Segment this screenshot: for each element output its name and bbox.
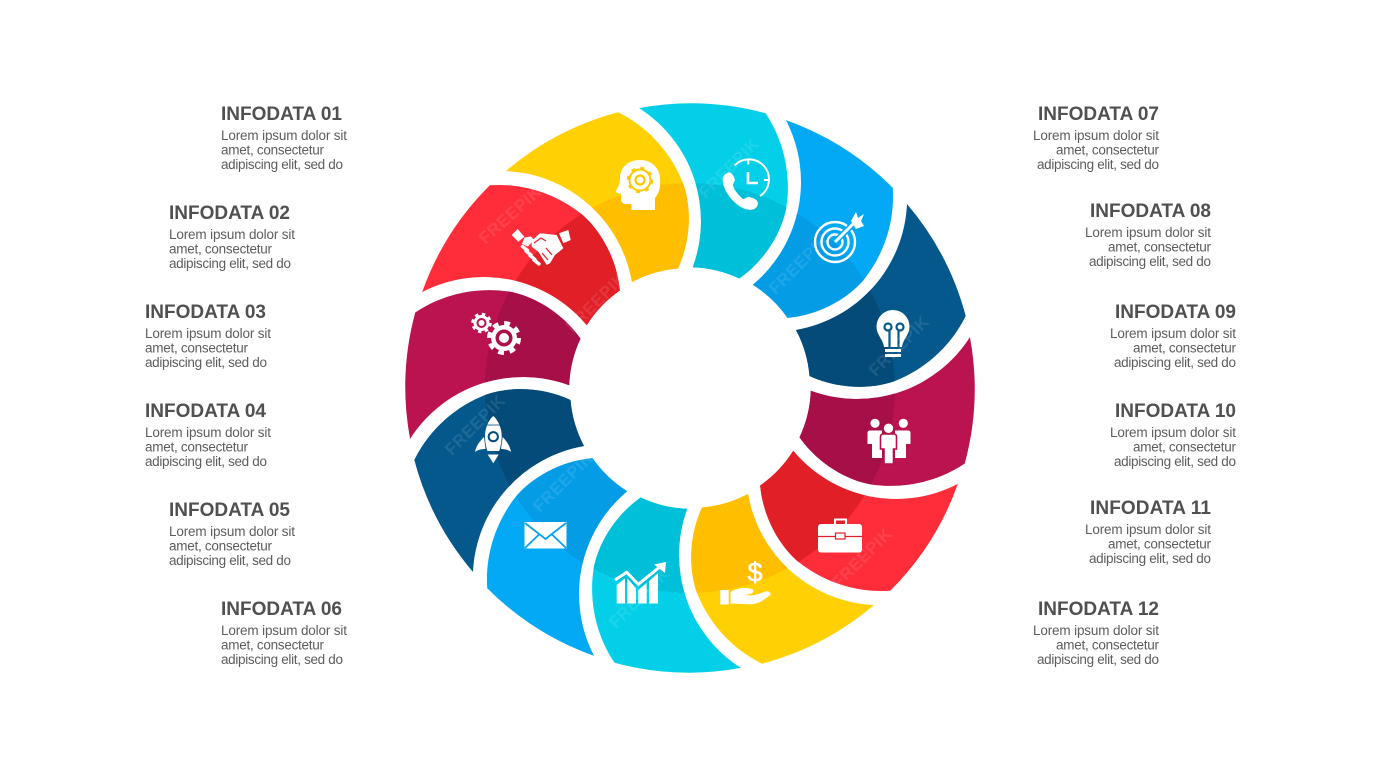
watermark text: FREEPIK <box>865 312 933 380</box>
label: INFODATA 05: Lorem ipsum dolor sit <box>169 524 295 539</box>
label: INFODATA 10: INFODATA 10 <box>1115 401 1236 422</box>
label: INFODATA 06: Lorem ipsum dolor sit <box>221 623 347 638</box>
label: INFODATA 01: Lorem ipsum dolor sit <box>221 128 347 143</box>
label: INFODATA 12: amet, consectetur <box>1056 638 1160 652</box>
label: INFODATA 01: adipiscing elit, sed do <box>221 157 343 172</box>
label: INFODATA 01: amet, consectetur <box>221 142 324 158</box>
label: INFODATA 06: INFODATA 06 <box>221 599 342 620</box>
label: INFODATA 02: INFODATA 02 <box>169 203 290 224</box>
watermark text: FREEPIK <box>765 230 833 298</box>
label: INFODATA 05 <box>169 500 295 568</box>
segment 05: blue with envelope icon <box>486 458 628 656</box>
label: INFODATA 03: adipiscing elit, sed do <box>145 355 267 370</box>
segment 01: yellow with head icon <box>506 112 689 282</box>
icon: rocket <box>475 416 511 463</box>
label: INFODATA 05: adipiscing elit, sed do <box>169 553 291 568</box>
segment 03: magenta with gears icon <box>405 290 580 439</box>
label: INFODATA 12: Lorem ipsum dolor sit <box>1033 623 1159 638</box>
label: INFODATA 12: adipiscing elit, sed do <box>1037 652 1159 667</box>
label: INFODATA 02: Lorem ipsum dolor sit <box>169 227 295 242</box>
label: INFODATA 02: amet, consectetur <box>169 242 272 256</box>
watermark text: FREEPIK <box>605 564 673 632</box>
label: INFODATA 02: adipiscing elit, sed do <box>169 256 291 271</box>
label: INFODATA 06: adipiscing elit, sed do <box>221 652 343 667</box>
label: INFODATA 09: Lorem ipsum dolor sit <box>1110 326 1236 341</box>
icon: growth chart <box>615 562 666 604</box>
label: INFODATA 03: amet, consectetur <box>145 340 248 356</box>
label: INFODATA 11: amet, consectetur <box>1108 536 1212 552</box>
infographic: ring with twelve labelled segments <box>146 103 1236 673</box>
label: INFODATA 09: adipiscing elit, sed do <box>1114 355 1236 370</box>
right column labels <box>1033 104 1236 667</box>
segment 11: red with briefcase icon <box>760 450 958 591</box>
left column labels <box>145 104 347 667</box>
label: INFODATA 08: adipiscing elit, sed do <box>1089 254 1211 269</box>
label: INFODATA 09: INFODATA 09 <box>1115 302 1236 323</box>
watermark text: FREEPIK <box>475 182 546 248</box>
label: INFODATA 04 <box>145 401 271 469</box>
label: INFODATA 04: INFODATA 04 <box>145 401 266 422</box>
label: INFODATA 08: INFODATA 08 <box>1090 201 1211 222</box>
watermark text: FREEPIK <box>441 391 509 459</box>
label: INFODATA 03: Lorem ipsum dolor sit <box>145 326 271 341</box>
icon: light bulb <box>876 310 910 357</box>
label: INFODATA 08: amet, consectetur <box>1108 240 1212 254</box>
label: INFODATA 12: INFODATA 12 <box>1038 599 1159 620</box>
label: INFODATA 07: INFODATA 07 <box>1038 104 1159 125</box>
label: INFODATA 07: Lorem ipsum dolor sit <box>1033 128 1159 143</box>
segment 10: magenta with team icon <box>800 337 975 486</box>
label: INFODATA 07: amet, consectetur <box>1056 142 1160 158</box>
segment 12: yellow with money hand icon <box>691 494 874 664</box>
segment 04: navy with rocket icon <box>414 389 584 572</box>
label: INFODATA 07: adipiscing elit, sed do <box>1037 157 1159 172</box>
watermark text: FREEPIK <box>529 448 597 516</box>
label: INFODATA 08: Lorem ipsum dolor sit <box>1085 225 1211 240</box>
segment 02: red with handshake icon <box>422 185 620 326</box>
watermark text <box>441 134 933 632</box>
label: INFODATA 11 <box>1085 498 1212 566</box>
label: INFODATA 03 <box>145 302 271 370</box>
label: INFODATA 09 <box>1110 302 1236 370</box>
icon: phone and clock <box>723 159 769 210</box>
watermark text: FREEPIK <box>562 268 630 336</box>
label: INFODATA 10: Lorem ipsum dolor sit <box>1110 425 1236 440</box>
icon: hand holding dollar: $ <box>747 558 763 588</box>
segment 06: cyan with growth chart icon <box>592 498 741 673</box>
label: INFODATA 11: adipiscing elit, sed do <box>1089 551 1211 566</box>
label: INFODATA 09: amet, consectetur <box>1133 340 1236 356</box>
label: INFODATA 04: adipiscing elit, sed do <box>145 454 267 469</box>
label: INFODATA 06 <box>221 599 347 667</box>
label: INFODATA 04: Lorem ipsum dolor sit <box>145 425 271 440</box>
icon: envelope <box>524 522 566 548</box>
label: INFODATA 04: amet, consectetur <box>145 440 248 454</box>
segment 08: blue with target icon <box>752 120 894 318</box>
segment 09: navy with light bulb icon <box>796 204 966 387</box>
label: INFODATA 08 <box>1085 201 1212 269</box>
label: INFODATA 03: INFODATA 03 <box>145 302 266 323</box>
label: INFODATA 01 <box>221 104 347 172</box>
label: INFODATA 11: INFODATA 11 <box>1090 498 1211 519</box>
icon: team of three people <box>868 419 910 464</box>
icon: target with arrow <box>815 212 864 262</box>
label: INFODATA 12 <box>1033 599 1160 667</box>
watermark text: FREEPIK <box>828 524 896 592</box>
label: INFODATA 06: amet, consectetur <box>221 638 324 652</box>
icon: briefcase <box>818 520 862 552</box>
icon: hand holding dollar <box>720 558 771 604</box>
icon: handshake <box>512 229 571 265</box>
label: INFODATA 11: Lorem ipsum dolor sit <box>1085 522 1211 537</box>
label: INFODATA 05: INFODATA 05 <box>169 500 290 521</box>
watermark text: FREEPIK <box>695 134 763 202</box>
label: INFODATA 10: adipiscing elit, sed do <box>1114 454 1236 469</box>
icon: head with gear <box>616 160 660 210</box>
ring chart <box>405 103 975 673</box>
label: INFODATA 07 <box>1033 104 1160 172</box>
label: INFODATA 05: amet, consectetur <box>169 538 272 554</box>
label: INFODATA 10: amet, consectetur <box>1133 440 1236 454</box>
label: INFODATA 01: INFODATA 01 <box>221 104 342 125</box>
segment 07: cyan with phone clock icon <box>639 103 788 278</box>
label: INFODATA 02 <box>169 203 295 271</box>
label: INFODATA 10 <box>1110 401 1236 469</box>
icon: two gears <box>473 314 518 352</box>
